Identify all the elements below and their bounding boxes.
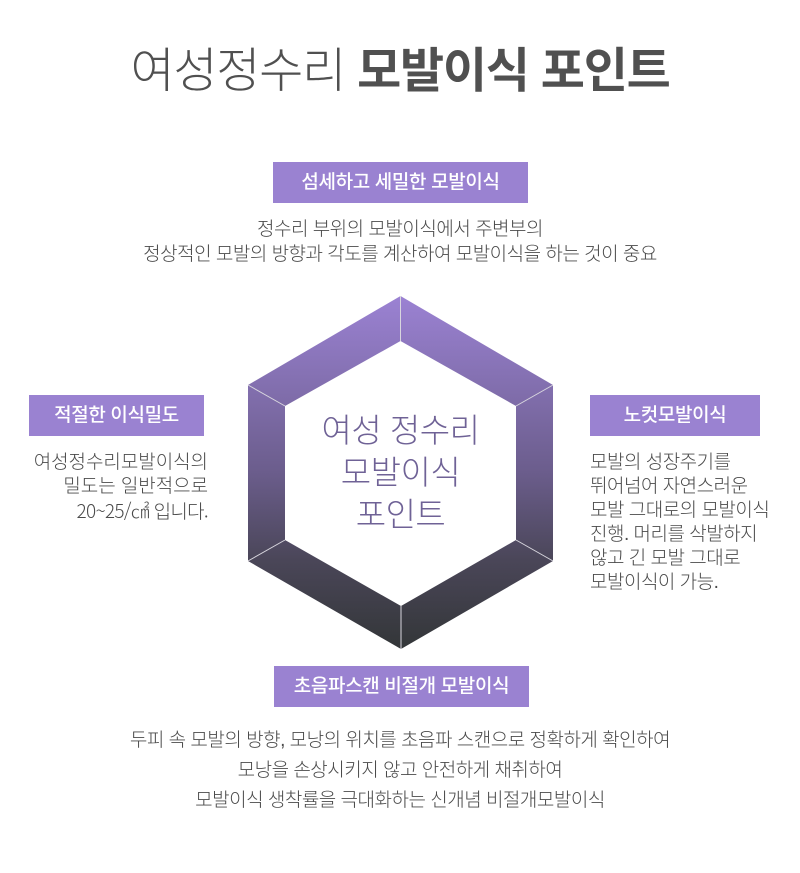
text: left description: 여성정수리모발이식의 <box>34 452 208 473</box>
text: top description <box>143 219 657 265</box>
text: right description <box>590 452 769 593</box>
text: right description: 모발 그대로의 모발이식 <box>590 500 769 521</box>
text: right description: 진행. 머리를 삭발하지 <box>590 524 757 545</box>
badge: bottom <box>274 666 529 707</box>
badge: right <box>590 395 760 436</box>
text: hexagon center: 모발이식 <box>341 454 460 491</box>
title: 여성정수리 모발이식 포인트 <box>130 45 670 98</box>
text: top description: 정상적인 모발의 방향과 각도를 계산하여 모발이식을 하는 것이 중요 <box>143 244 657 265</box>
badge: top: 섬세하고 세밀한 모발이식 <box>301 172 500 193</box>
chart: hexagon <box>248 296 554 649</box>
badge: top <box>273 162 528 203</box>
badge: right: 노컷모발이식 <box>624 405 726 426</box>
text: right description: 모발의 성장주기를 <box>590 452 731 473</box>
panel: top point <box>143 162 657 265</box>
text: right description: 않고 긴 모발 그대로 <box>590 548 740 569</box>
text: hexagon center <box>322 412 479 533</box>
badge: left <box>29 395 204 436</box>
panel: left point <box>29 395 208 524</box>
badge: left: 적절한 이식밀도 <box>54 405 179 426</box>
text: left description: 밀도는 일반적으로 <box>63 476 208 497</box>
text: right description: 뛰어넘어 자연스러운 <box>590 476 748 497</box>
text: bottom description: 두피 속 모발의 방향, 모낭의 위치를 초음파 스캔으로 정확하게 확인하여 <box>130 730 670 751</box>
badge: bottom: 초음파스캔 비절개 모발이식 <box>294 676 509 697</box>
text: right description: 모발이식이 가능. <box>590 572 718 593</box>
text: bottom description: 모발이식 생착률을 극대화하는 신개념 비절개모발이식 <box>195 790 605 811</box>
text: bottom description: 모낭을 손상시키지 않고 안전하게 채취하여 <box>238 760 562 781</box>
panel: bottom point <box>130 666 670 811</box>
panel: right point <box>590 395 769 593</box>
text: hexagon center: 여성 정수리 <box>322 412 479 449</box>
text: bottom description <box>130 730 670 811</box>
text: top description: 정수리 부위의 모발이식에서 주변부의 <box>257 219 543 240</box>
text: left description <box>34 452 208 524</box>
text: left description: 20~25/㎠ 입니다. <box>77 497 208 524</box>
text: hexagon center: 포인트 <box>356 496 445 533</box>
